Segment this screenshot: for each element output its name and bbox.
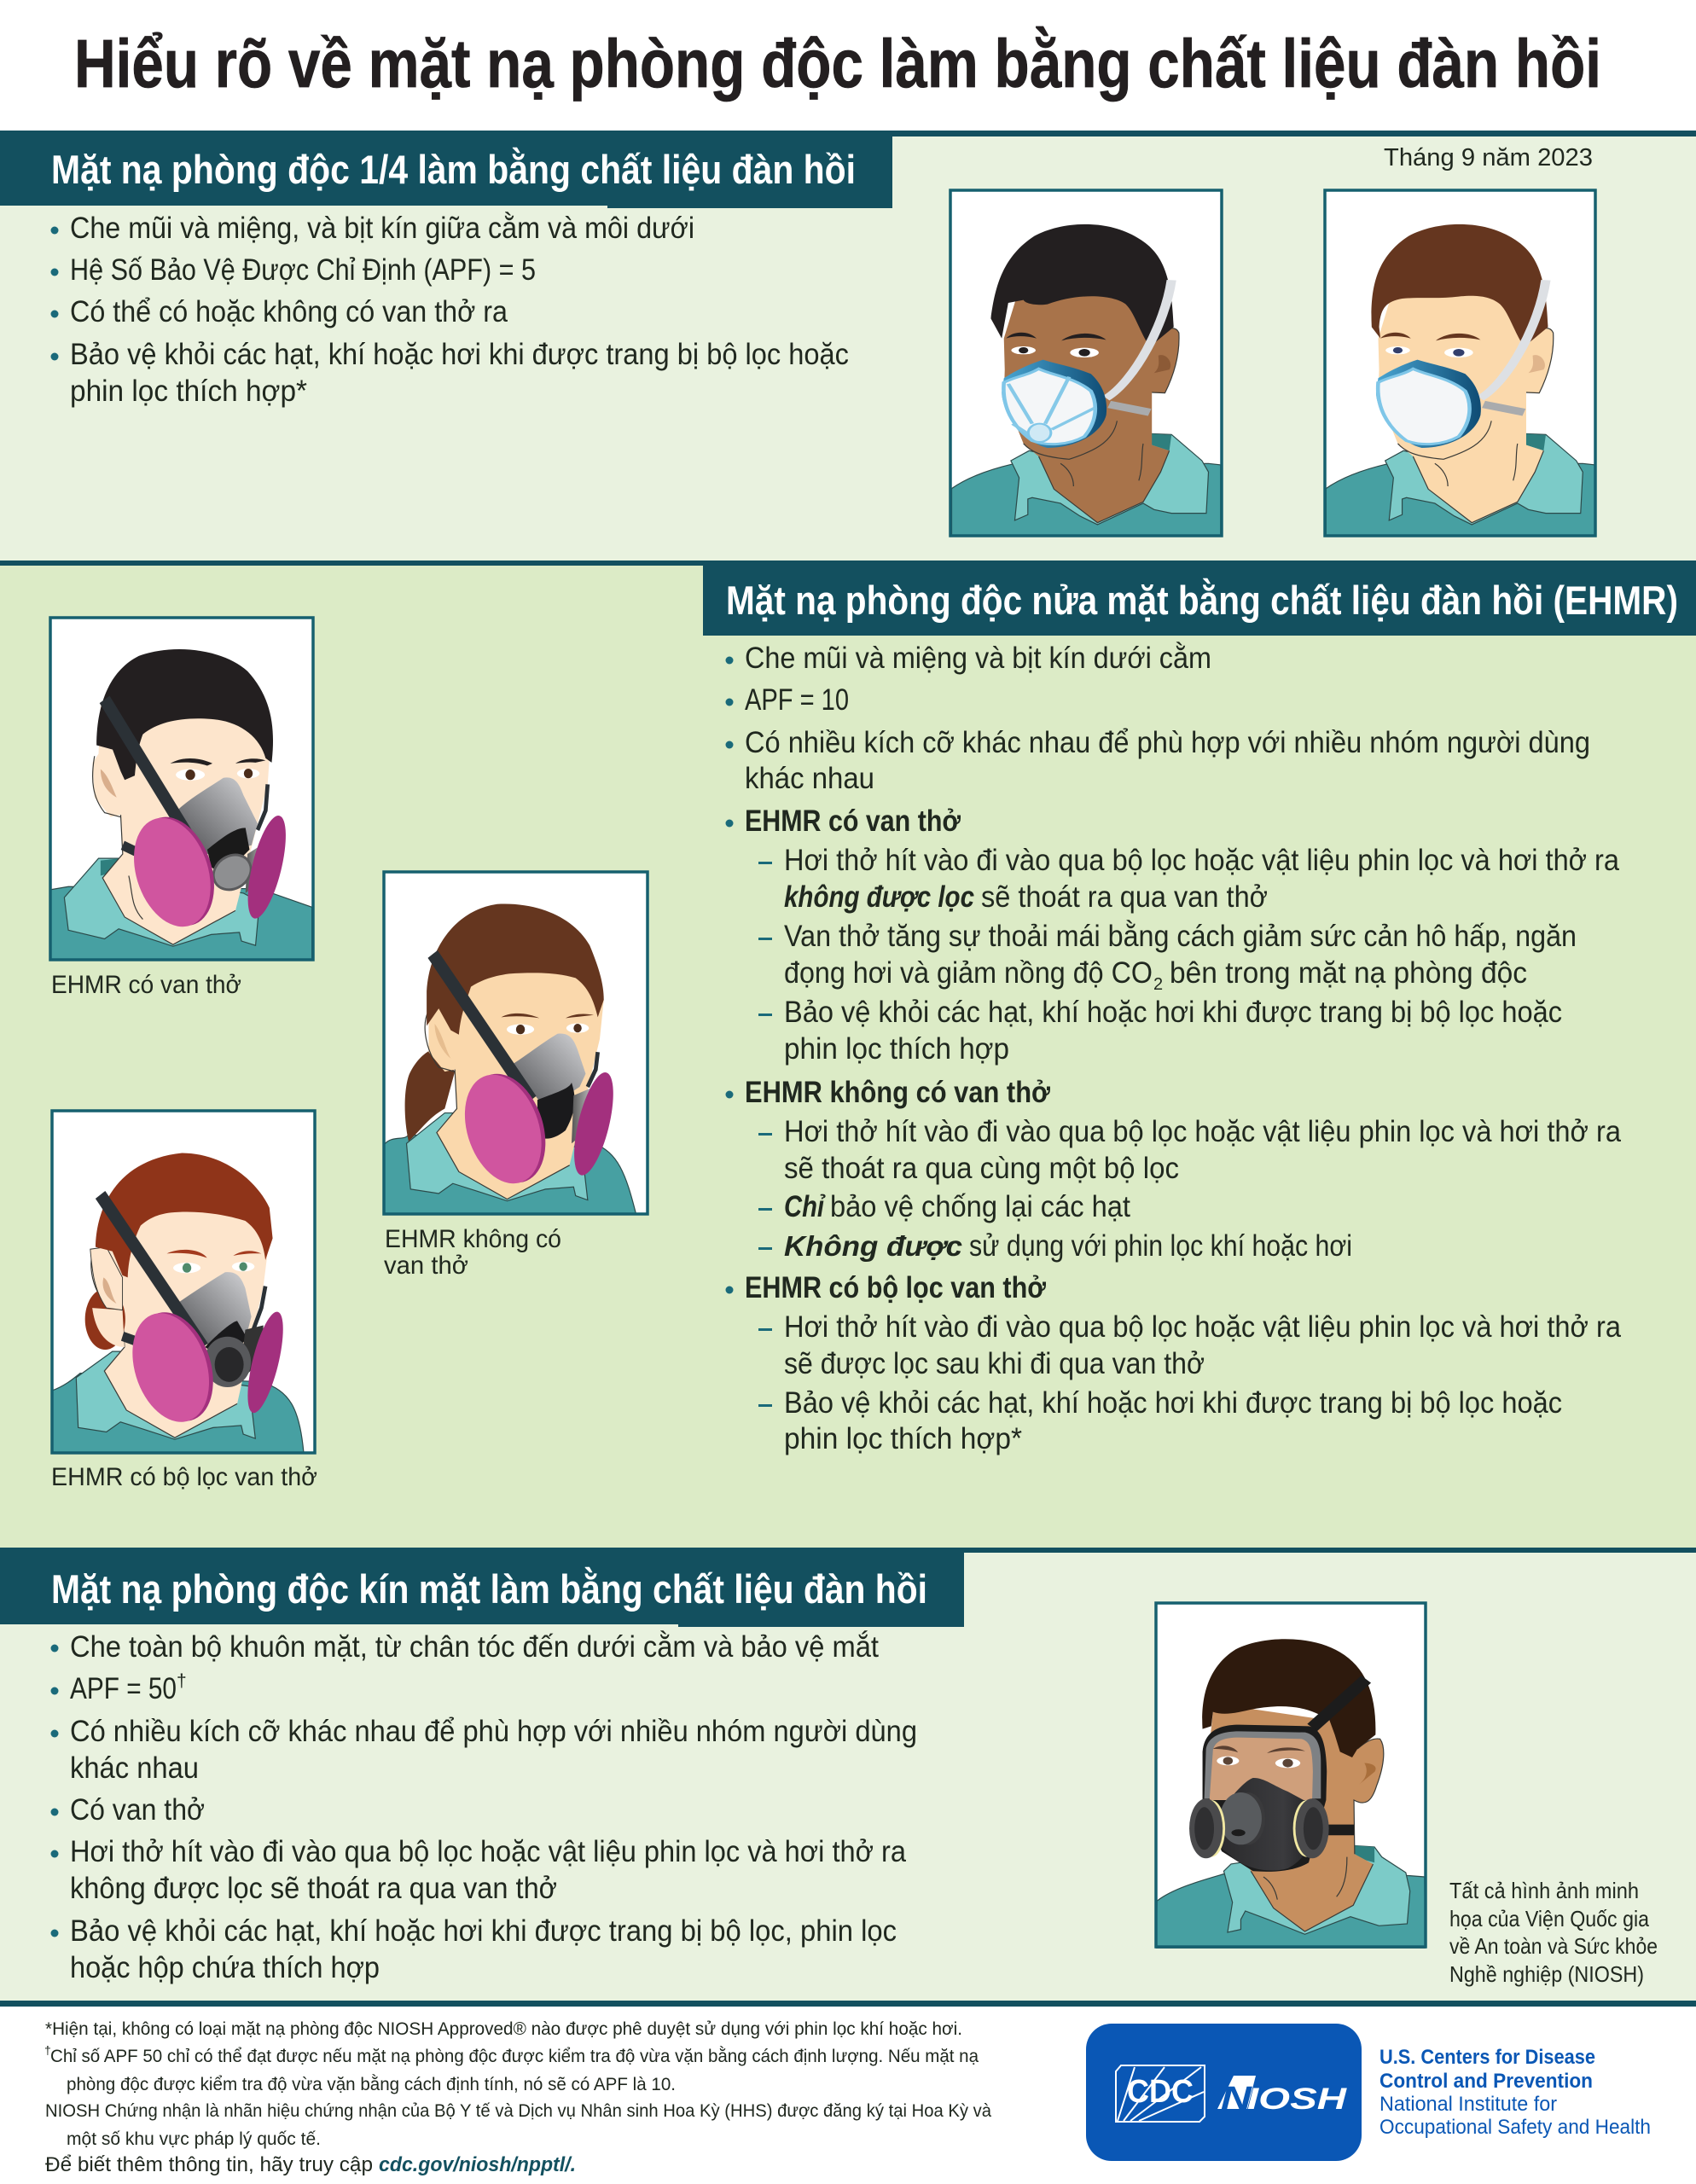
bullet list: quarter mask: Có thể có hoặc không có van thở ra [70, 295, 508, 328]
footnotes: một số khu vực pháp lý quốc tế. [67, 2129, 321, 2149]
footnotes: phòng độc được kiểm tra độ vừa vặn bằng cách định tính, nó sẽ có APF là 10. [67, 2075, 676, 2094]
illustration: EHMR with exhalation valve [50, 618, 313, 960]
bullet list: EHMR without exhalation valve: Chỉ [784, 1190, 826, 1223]
bullet list: EHMR with exhalation valve: 2 [1153, 975, 1163, 994]
illustration: full facepiece respirator [1156, 1603, 1426, 1948]
illustration: EHMR without exhalation valve [384, 872, 648, 1214]
footnotes [44, 2019, 991, 2176]
bullet list: quarter mask: phin lọc thích hợp* [70, 375, 307, 408]
footnotes: NIOSH Chứng nhận là nhãn hiệu chứng nhận của Bộ Y tế và Dịch vụ Nhân sinh Hoa Kỳ (HHS) được đăng ký tại Hoa Kỳ và [45, 2101, 991, 2121]
bullet list: half mask general [725, 642, 1590, 795]
bullet list: full facepiece: Có nhiều kích cỡ khác nhau để phù hợp với nhiều nhóm người dùng [70, 1715, 917, 1748]
footer rule [0, 2001, 1696, 2007]
panel: full facepiece respirator [0, 1548, 1696, 2001]
footnotes: cdc.gov/niosh/npptl/. [379, 2153, 576, 2176]
bullet list: EHMR with exhalation valve: EHMR có van thở [745, 804, 961, 838]
bullet list: quarter mask: Bảo vệ khỏi các hạt, khí hoặc hơi khi được trang bị bộ lọc hoặc [70, 338, 849, 371]
image credit [1449, 1878, 1658, 1987]
logo: NIOSH wordmark: IOSH [1247, 2082, 1347, 2116]
bullet list: EHMR with exhalation valve: sẽ thoát ra qua van thở [981, 880, 1268, 914]
bullet list: half mask general: khác nhau [745, 762, 874, 795]
bullet list: EHMR without exhalation valve: sử dụng với phin lọc khí hoặc hơi [969, 1229, 1352, 1263]
image credit: Nghề nghiệp (NIOSH) [1449, 1961, 1644, 1987]
bullet list: EHMR without exhalation valve: bảo vệ chống lại các hạt [830, 1190, 1130, 1223]
bullet list: half mask general: APF = 10 [745, 683, 849, 717]
bullet list: EHMR with exhalation valve: đọng hơi và giảm nồng độ CO [784, 956, 1153, 990]
bullet list: EHMR without exhalation valve: EHMR không có van thở [745, 1076, 1050, 1109]
heading: quarter mask [0, 131, 892, 208]
logo: NIOSH wordmark: N [1221, 2081, 1253, 2117]
illustration: man with quarter mask, smooth [1325, 190, 1595, 536]
image credit: họa của Viện Quốc gia [1449, 1906, 1649, 1931]
bullet list: EHMR without exhalation valve [725, 1076, 1621, 1263]
panel: quarter mask respirator [0, 131, 1696, 561]
bullet list: quarter mask: Hệ Số Bảo Vệ Được Chỉ Định (APF) = 5 [70, 253, 536, 287]
bullet list: EHMR with filtered exhalation valve: Bảo vệ khỏi các hạt, khí hoặc hơi khi được trang bị bộ lọc hoặc [784, 1386, 1562, 1420]
logo: CDC mark: CDC [1127, 2074, 1194, 2110]
footnotes: Để biết thêm thông tin, hãy truy cập [45, 2153, 373, 2176]
bullet list: quarter mask: Che mũi và miệng, và bịt kín giữa cằm và môi dưới [70, 212, 694, 245]
bullet list: EHMR without exhalation valve: Hơi thở hít vào đi vào qua bộ lọc hoặc vật liệu phin lọc và hơi thở ra [784, 1115, 1621, 1148]
bullet list: full facepiece: Hơi thở hít vào đi vào qua bộ lọc hoặc vật liệu phin lọc và hơi thở ra [70, 1835, 906, 1868]
caption: EHMR without valve: EHMR không có [385, 1225, 561, 1253]
bullet list: full facepiece: khác nhau [70, 1751, 199, 1785]
bullet list: full facepiece: Có van thở [70, 1793, 205, 1827]
agency name: Occupational Safety and Health [1379, 2116, 1651, 2139]
logo: CDC NIOSH [1086, 2024, 1362, 2161]
footnotes: Chỉ số APF 50 chỉ có thể đạt được nếu mặt nạ phòng độc được kiểm tra độ vừa vặn bằng cách định lượng. Nếu mặt nạ [50, 2047, 979, 2066]
panel: half mask respirator [0, 561, 1696, 1549]
bullet list: EHMR with exhalation valve: không được lọc [784, 880, 974, 914]
bullet list: EHMR with filtered exhalation valve: sẽ được lọc sau khi đi qua van thở [784, 1347, 1205, 1380]
caption: EHMR without valve: van thở [384, 1252, 468, 1280]
bullet list: full facepiece: hoặc hộp chứa thích hợp [70, 1951, 380, 1984]
bullet list: EHMR with exhalation valve: phin lọc thích hợp [784, 1032, 1009, 1066]
bullet list: EHMR with filtered exhalation valve: Hơi thở hít vào đi vào qua bộ lọc hoặc vật liệu phin lọc và hơi thở ra [784, 1310, 1621, 1344]
bullet list: EHMR with filtered exhalation valve: EHMR có bộ lọc van thở [745, 1271, 1046, 1304]
bullet list: EHMR with exhalation valve: Van thở tăng sự thoải mái bằng cách giảm sức cản hô hấp, ngăn [784, 920, 1577, 953]
logo: CDC mark [1116, 2065, 1205, 2122]
bullet list: full facepiece: † [177, 1671, 187, 1691]
illustration: EHMR with filtered exhalation valve [52, 1111, 315, 1453]
caption: EHMR with filtered valve: EHMR có bộ lọc van thở [51, 1463, 317, 1491]
bullet list: EHMR with exhalation valve [725, 804, 1619, 1066]
bullet list: half mask general: Che mũi và miệng và bịt kín dưới cằm [745, 642, 1211, 675]
bullet list: EHMR with filtered exhalation valve [725, 1271, 1621, 1455]
agency name [1379, 2046, 1651, 2139]
date: Tháng 9 năm 2023 [1384, 144, 1593, 171]
caption: EHMR with valve: EHMR có van thở [51, 971, 241, 999]
agency name: U.S. Centers for Disease [1379, 2046, 1595, 2069]
footnotes: † [44, 2043, 51, 2057]
agency name: Control and Prevention [1379, 2070, 1593, 2093]
bullet list: full facepiece: Bảo vệ khỏi các hạt, khí hoặc hơi khi được trang bị bộ lọc, phin lọc [70, 1914, 897, 1948]
heading: full facepiece: Mặt nạ phòng độc kín mặt làm bằng chất liệu đàn hồi [51, 1566, 927, 1612]
heading: half mask [703, 561, 1696, 636]
bullet list: EHMR with exhalation valve: bên trong mặt nạ phòng độc [1170, 956, 1527, 990]
bullet list: full facepiece: Che toàn bộ khuôn mặt, từ chân tóc đến dưới cằm và bảo vệ mắt [70, 1630, 879, 1664]
image credit: về An toàn và Sức khỏe [1449, 1933, 1658, 1959]
illustration: man with quarter mask, ribbed [950, 190, 1222, 536]
logo: NIOSH wordmark [1217, 2076, 1347, 2117]
bullet list: EHMR with exhalation valve: Hơi thở hít vào đi vào qua bộ lọc hoặc vật liệu phin lọc và hơi thở ra [784, 844, 1619, 877]
bullet list: full facepiece: không được lọc sẽ thoát ra qua van thở [70, 1872, 557, 1905]
caption: EHMR without valve [384, 1225, 561, 1280]
bullet list: full facepiece [51, 1630, 917, 1984]
image credit: Tất cả hình ảnh minh [1449, 1878, 1639, 1903]
bullet list: EHMR with exhalation valve: Bảo vệ khỏi các hạt, khí hoặc hơi khi được trang bị bộ lọc hoặc [784, 996, 1562, 1029]
heading: full facepiece [0, 1548, 964, 1627]
bullet list: EHMR without exhalation valve: sẽ thoát ra qua cùng một bộ lọc [784, 1152, 1179, 1185]
bullet list: EHMR without exhalation valve: Không được [784, 1230, 962, 1262]
footnotes: *Hiện tại, không có loại mặt nạ phòng độc NIOSH Approved® nào được phê duyệt sử dụng với phin lọc khí hoặc hơi. [45, 2019, 962, 2039]
bullet list: quarter mask [51, 212, 849, 408]
bullet list: EHMR with filtered exhalation valve: phin lọc thích hợp* [784, 1422, 1022, 1455]
bullet list: half mask general: Có nhiều kích cỡ khác nhau để phù hợp với nhiều nhóm người dùng [745, 726, 1590, 759]
bullet list: full facepiece: APF = 50 [70, 1672, 177, 1705]
agency name: National Institute for [1379, 2093, 1557, 2116]
heading: quarter mask: Mặt nạ phòng độc 1/4 làm bằng chất liệu đàn hồi [51, 147, 856, 192]
